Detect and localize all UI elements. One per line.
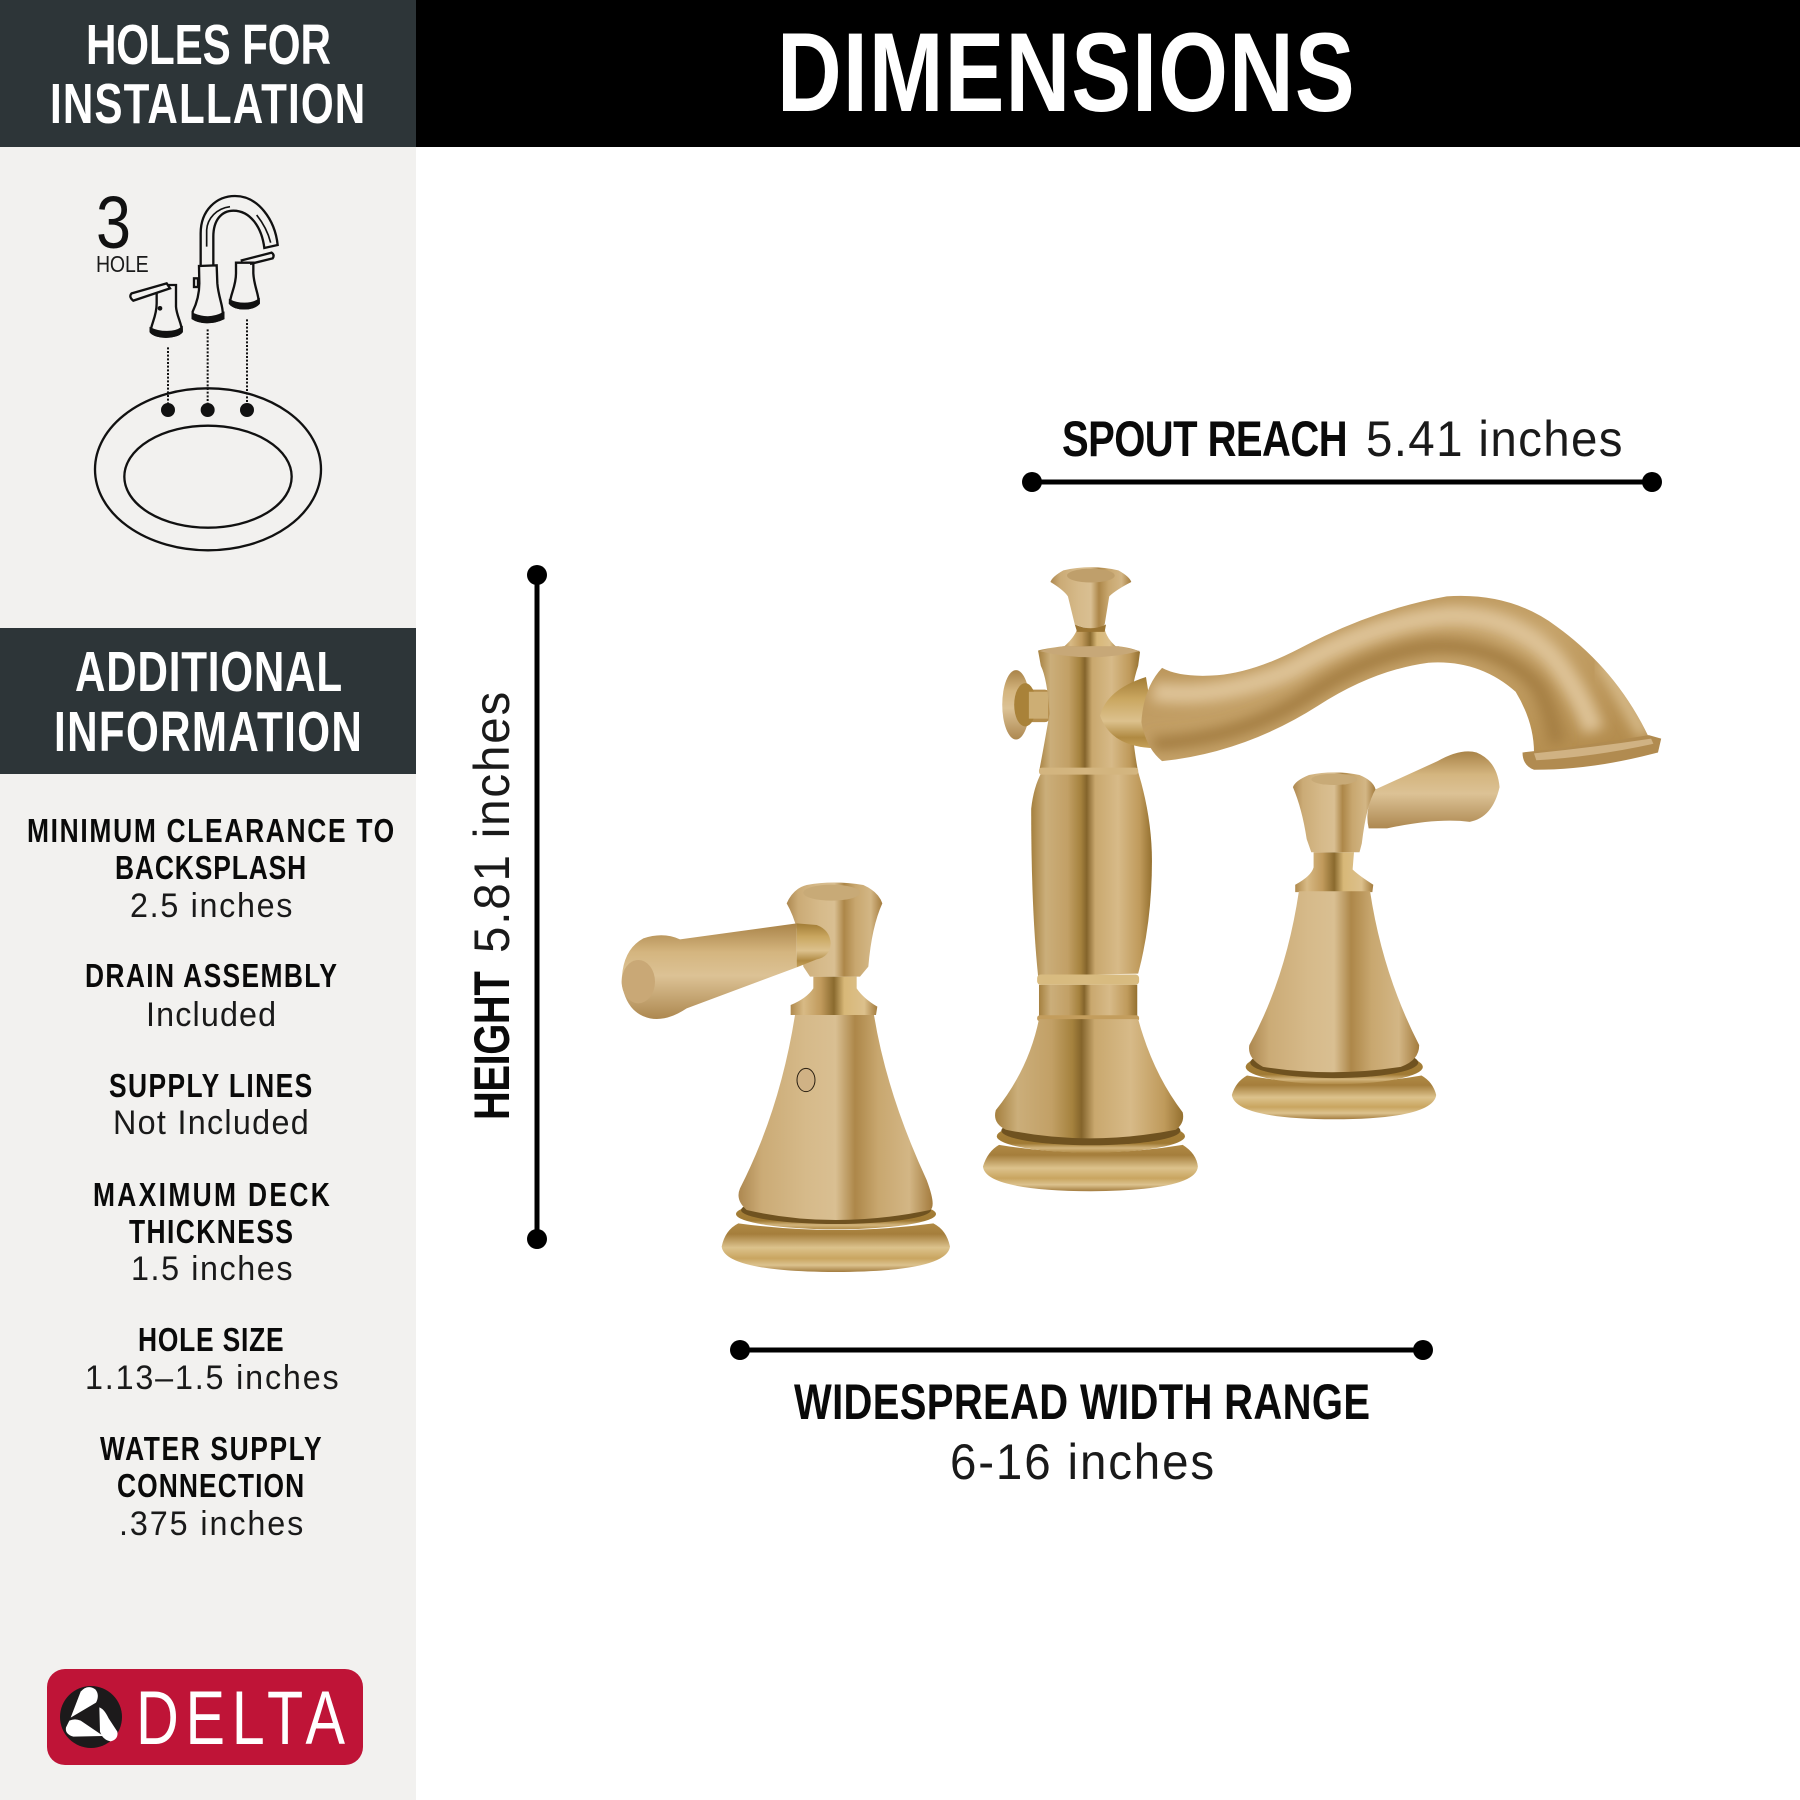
height dimension — [464, 565, 547, 1249]
heading: holes for installation: HOLES FOR — [86, 13, 331, 77]
title: DIMENSIONS — [777, 11, 1355, 135]
text block: minimum clearance — [27, 813, 394, 925]
heading: holes for installation — [0, 0, 416, 147]
text block: drain assembly: Included — [146, 996, 276, 1034]
panel: sidebar — [0, 0, 416, 1800]
text block: minimum clearance: MINIMUM CLEARANCE TO — [27, 813, 394, 850]
icon: 3 hole faucet and sink: 3 — [96, 181, 131, 264]
faucet: left handle — [622, 882, 950, 1272]
heading: additional information: INFORMATION — [54, 700, 362, 764]
spout reach dimension — [1022, 411, 1662, 492]
height dimension: HEIGHT — [464, 971, 520, 1120]
text block: maximum deck thickness: THICKNESS — [129, 1214, 293, 1251]
text block: maximum deck thickness — [93, 1177, 330, 1288]
spout — [1100, 596, 1661, 770]
title bar: dimensions — [416, 0, 1800, 147]
heading: holes for installation: INSTALLATION — [50, 72, 365, 136]
text block: water supply connection: CONNECTION — [117, 1468, 304, 1505]
text block: hole size: 1.13–1.5 inches — [85, 1359, 339, 1397]
text block: drain assembly — [85, 958, 337, 1034]
text block: water supply connection: WATER SUPPLY — [100, 1431, 322, 1468]
spout reach dimension: 5.41 inches — [1366, 412, 1623, 467]
spout reach dimension: SPOUT REACH — [1062, 411, 1348, 467]
text block: water supply connection — [100, 1431, 322, 1543]
widespread width dimension — [730, 1340, 1433, 1490]
shutoff knob — [1002, 670, 1050, 739]
text block: drain assembly: DRAIN ASSEMBLY — [85, 958, 337, 995]
icon: 3 hole faucet and sink — [95, 181, 321, 550]
text block: water supply connection: .375 inches — [119, 1505, 303, 1543]
heading: additional information: ADDITIONAL — [75, 640, 342, 704]
widespread width dimension: 6-16 inches — [950, 1435, 1214, 1490]
center body — [983, 567, 1198, 1191]
logo: delta: DELTA — [136, 1676, 346, 1761]
right handle — [1232, 751, 1500, 1119]
heading: additional information — [0, 628, 416, 774]
text block: maximum deck thickness: MAXIMUM DECK — [93, 1177, 330, 1214]
text block: supply lines: SUPPLY LINES — [109, 1068, 312, 1105]
logo: delta — [47, 1669, 363, 1765]
text block: supply lines: Not Included — [113, 1104, 309, 1142]
icon: 3 hole faucet and sink: HOLE — [96, 252, 149, 277]
text block: hole size — [85, 1322, 339, 1397]
text block: maximum deck thickness: 1.5 inches — [131, 1250, 293, 1288]
height dimension: 5.81 inches — [465, 692, 520, 953]
text block: minimum clearance: BACKSPLASH — [115, 850, 306, 887]
text block: hole size: HOLE SIZE — [138, 1322, 284, 1359]
faucet: spout, center body and right handle — [983, 567, 1661, 1191]
text block: minimum clearance: 2.5 inches — [130, 887, 292, 925]
widespread width dimension: WIDESPREAD WIDTH RANGE — [794, 1374, 1370, 1430]
text block: supply lines — [109, 1068, 312, 1142]
